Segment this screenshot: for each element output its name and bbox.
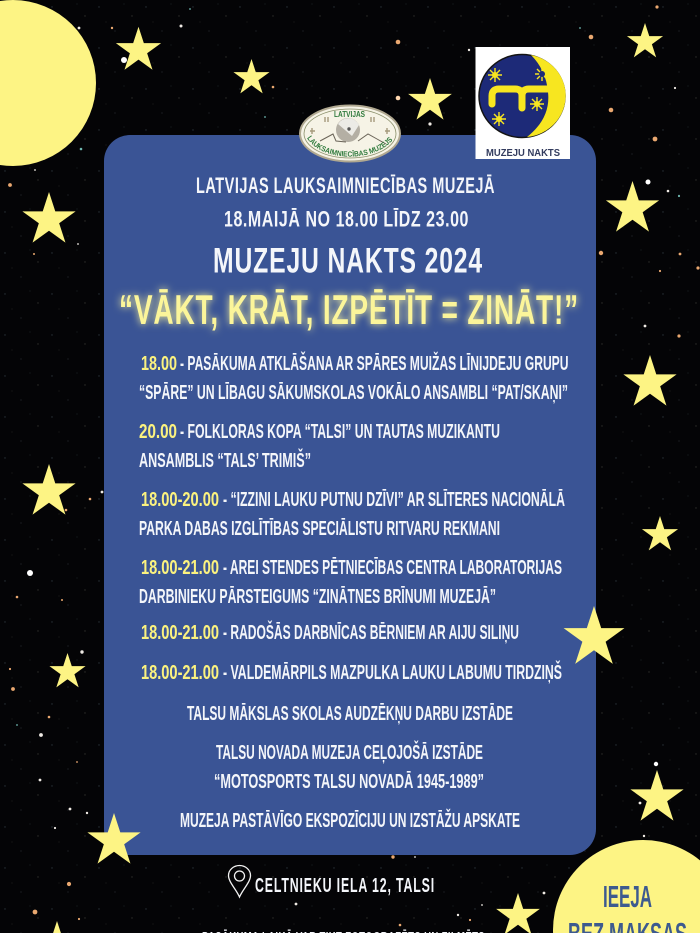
- logo: Latvijas Lauksaimniecības muzejs: LAUKSAIMNIECĪBAS MUZEJS: [307, 135, 392, 157]
- badge text: free entry: [568, 879, 687, 933]
- heading: MUZEJU NAKTS 2024: [213, 242, 483, 280]
- text: address: CELTNIEKU IELA 12, TALSI: [255, 874, 435, 897]
- programme item 18.00-20.00: 18.00-20.00: [141, 488, 219, 511]
- programme item 18.00-21.00 market: 18.00-21.00: [141, 661, 219, 684]
- logo: Latvijas Lauksaimniecības muzejs: [299, 104, 401, 162]
- logo: Muzeju nakts: [476, 47, 570, 159]
- programme item 18.00-21.00 laboratory: [139, 556, 562, 608]
- star over panel: [564, 606, 624, 664]
- star: [233, 59, 270, 93]
- star: [39, 921, 75, 933]
- star: [606, 181, 659, 232]
- badge text: free entry: IEEJA: [603, 879, 652, 914]
- logo: Latvijas Lauksaimniecības muzejs: LATVIJAS: [334, 110, 366, 119]
- star: [22, 192, 76, 243]
- programme item 20.00: [139, 420, 500, 472]
- programme item 20.00: ANSAMBLIS “TALS’ TRIMIŠ”: [139, 448, 311, 472]
- star: [623, 355, 677, 406]
- programme item 20.00: 20.00: [139, 420, 177, 443]
- star: [49, 653, 86, 687]
- text: travelling exhibition: [214, 740, 484, 793]
- text: date: 18.MAIJĀ NO 18.00 LĪDZ 23.00: [224, 206, 469, 232]
- programme item 18.00-21.00 market: [141, 660, 562, 684]
- logo: Muzeju nakts: MUZEJU NAKTS: [486, 148, 560, 159]
- text: venue: LATVIJAS LAUKSAIMNIECĪBAS MUZEJĀ: [196, 173, 495, 198]
- programme item 18.00: [139, 351, 568, 404]
- programme item 18.00-21.00 workshops: [141, 620, 519, 644]
- icon: location pin: [228, 866, 250, 897]
- star: [408, 78, 452, 120]
- star over panel: [87, 813, 141, 864]
- programme item 18.00-21.00 laboratory: 18.00-21.00: [141, 556, 219, 579]
- panel: programme: [104, 135, 596, 855]
- programme item 18.00: 18.00: [141, 352, 177, 375]
- moon top left: [0, 0, 96, 166]
- text: travelling exhibition: “MOTOSPORTS TALSU NOVADĀ 1945-1989”: [214, 770, 484, 793]
- moon bottom right: [553, 840, 700, 933]
- star: [642, 516, 678, 550]
- programme item 18.00-21.00 workshops: 18.00-21.00: [141, 621, 219, 644]
- star: [627, 23, 663, 57]
- star: [496, 893, 540, 933]
- star: [630, 770, 684, 821]
- star: [22, 464, 76, 515]
- programme item 18.00-20.00: [139, 488, 565, 540]
- star: [116, 27, 161, 70]
- text: travelling exhibition: TALSU NOVADA MUZEJA CEĻOJOŠĀ IZSTĀDE: [216, 740, 483, 764]
- programme item 20.00: - FOLKLORAS KOPA “TALSI” UN TAUTAS MUZIKANTU: [180, 420, 500, 443]
